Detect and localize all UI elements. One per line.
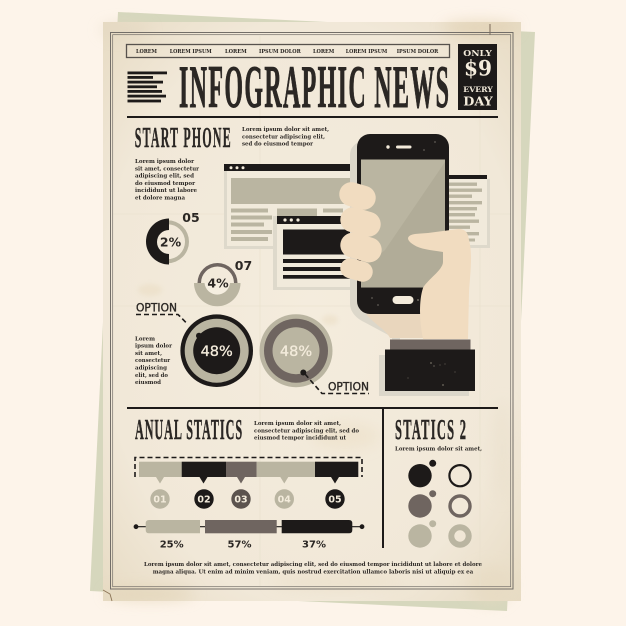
web window: right back [447,175,490,248]
text block: circle caption [135,336,173,386]
page border frame [110,32,513,589]
price box: DAY [463,94,493,108]
callout: option right [305,374,369,394]
dot chart: statics 2 [408,460,471,548]
numbered markers: 05 [328,494,342,506]
web window: front [273,216,359,290]
price box: ONLY [463,49,493,59]
panel: newspaper page [100,21,521,605]
top navigation bar: IPSUM DOLOR [397,49,439,55]
top navigation bar: LOREM [136,49,157,55]
text block: anual statics intro: eiusmod tempor incididunt ut [254,436,346,442]
text block: anual statics intro: Lorem ipsum dolor sit amet, [254,421,341,427]
price box [458,44,497,110]
shirt cuff [379,340,475,396]
ring chart: 48% dark: 48% [201,344,233,360]
timeline bar [134,520,364,533]
text block: circle caption: consectetur [135,358,171,364]
donut chart: 4%: 4% [207,276,229,290]
text block: circle caption: adipiscing [135,366,167,372]
phone [357,134,449,314]
text block: footer: Lorem ipsum dolor sit amet, consectetur adipiscing elit, sed do eiusmod tempor incididunt ut labore et dolore [144,562,482,568]
top navigation bar: LOREM [313,49,334,55]
title: INFOGRAPHIC NEWS [179,53,449,120]
numbered markers: 02 [197,494,211,506]
text block: left paragraph: Lorem ipsum dolor [135,159,195,165]
text block: left paragraph: incididunt ut labore [135,188,197,194]
text block: circle caption: ipsum dolor [135,344,173,350]
text block: left paragraph: sit amet, consectetur [135,166,200,172]
heading: statics 2: STATICS 2 [395,413,466,445]
text block: circle caption: Lorem [135,336,155,342]
icon: headline lines [128,72,167,102]
label: 05: 05 [182,210,200,225]
text block: left paragraph [135,159,200,202]
price box: $9 [464,56,492,80]
text block: anual statics intro [254,421,359,442]
ring chart: 48% grey: 48% [280,344,312,360]
price box: EVERY [463,85,494,94]
hand: palm behind phone [366,314,424,338]
text block: left paragraph: adipiscing elit, sed [135,174,194,180]
hand: fingers [336,179,385,284]
section rule [127,407,498,409]
bar chart: segments [139,462,358,484]
text block: circle caption: sit amet, [135,351,162,357]
phone shadow [350,143,400,342]
section divider [382,408,384,548]
text block: start phone intro: sed do eiusmod tempor [242,141,314,147]
text block: start phone intro: consectetur adipiscing elit, [242,134,325,140]
text block: circle caption: eiusmod [135,380,161,386]
text block: start phone intro [242,127,329,147]
top navigation bar: IPSUM DOLOR [259,49,301,55]
ring chart: 48% grey [260,314,332,387]
timeline labels: 57% [228,540,251,550]
top navigation bar: LOREM IPSUM [346,49,387,55]
heading: anual statics: ANUAL STATICS [135,413,242,446]
green back sheet [90,12,535,611]
numbered markers: 03 [234,494,248,506]
text block: left paragraph: et dolore magna [135,196,185,202]
header rule [127,116,498,118]
text block: start phone intro: Lorem ipsum dolor sit amet, [242,127,329,133]
donut chart: 2% [146,218,189,264]
web window: large back [224,164,359,249]
text block: left paragraph: do eiusmod tempor [135,181,196,187]
top navigation bar [126,44,450,58]
timeline labels [160,540,326,550]
callout: option left [136,300,187,324]
text block: footer: magna aliqua. Ut enim ad minim veniam, quis nostrud exercitation ullamco laboris nisi ut aliquip ex ea [153,570,473,576]
donut chart: 4% [194,263,240,306]
top navigation bar: LOREM IPSUM [170,49,212,55]
paper stains [100,21,518,605]
ring chart: 48% dark [180,314,253,387]
text block: anual statics intro: consectetur adipiscing elit, sed do [254,428,359,434]
phone wear specks [372,142,436,306]
dashed frame [135,458,362,477]
text block: footer [144,562,482,576]
timeline labels: 37% [302,540,326,550]
label: 07: 07 [235,258,252,273]
callout: option left: OPTION [136,300,177,314]
heading: start phone: START PHONE [135,121,231,154]
text block: circle caption: elit, sed do [135,373,168,379]
callout: option right: OPTION [328,379,369,393]
top navigation bar: LOREM [225,49,247,55]
cream middle sheet [103,22,521,601]
donut chart: 2%: 2% [160,234,182,250]
numbered markers [150,489,345,509]
numbered markers: 01 [153,494,167,506]
numbered markers: 04 [278,494,291,506]
crease lines [113,36,511,586]
hand: palm and thumb [408,229,471,339]
text block: statics 2 intro: Lorem ipsum dolor sit amet, [395,446,482,452]
timeline labels: 25% [160,540,184,550]
